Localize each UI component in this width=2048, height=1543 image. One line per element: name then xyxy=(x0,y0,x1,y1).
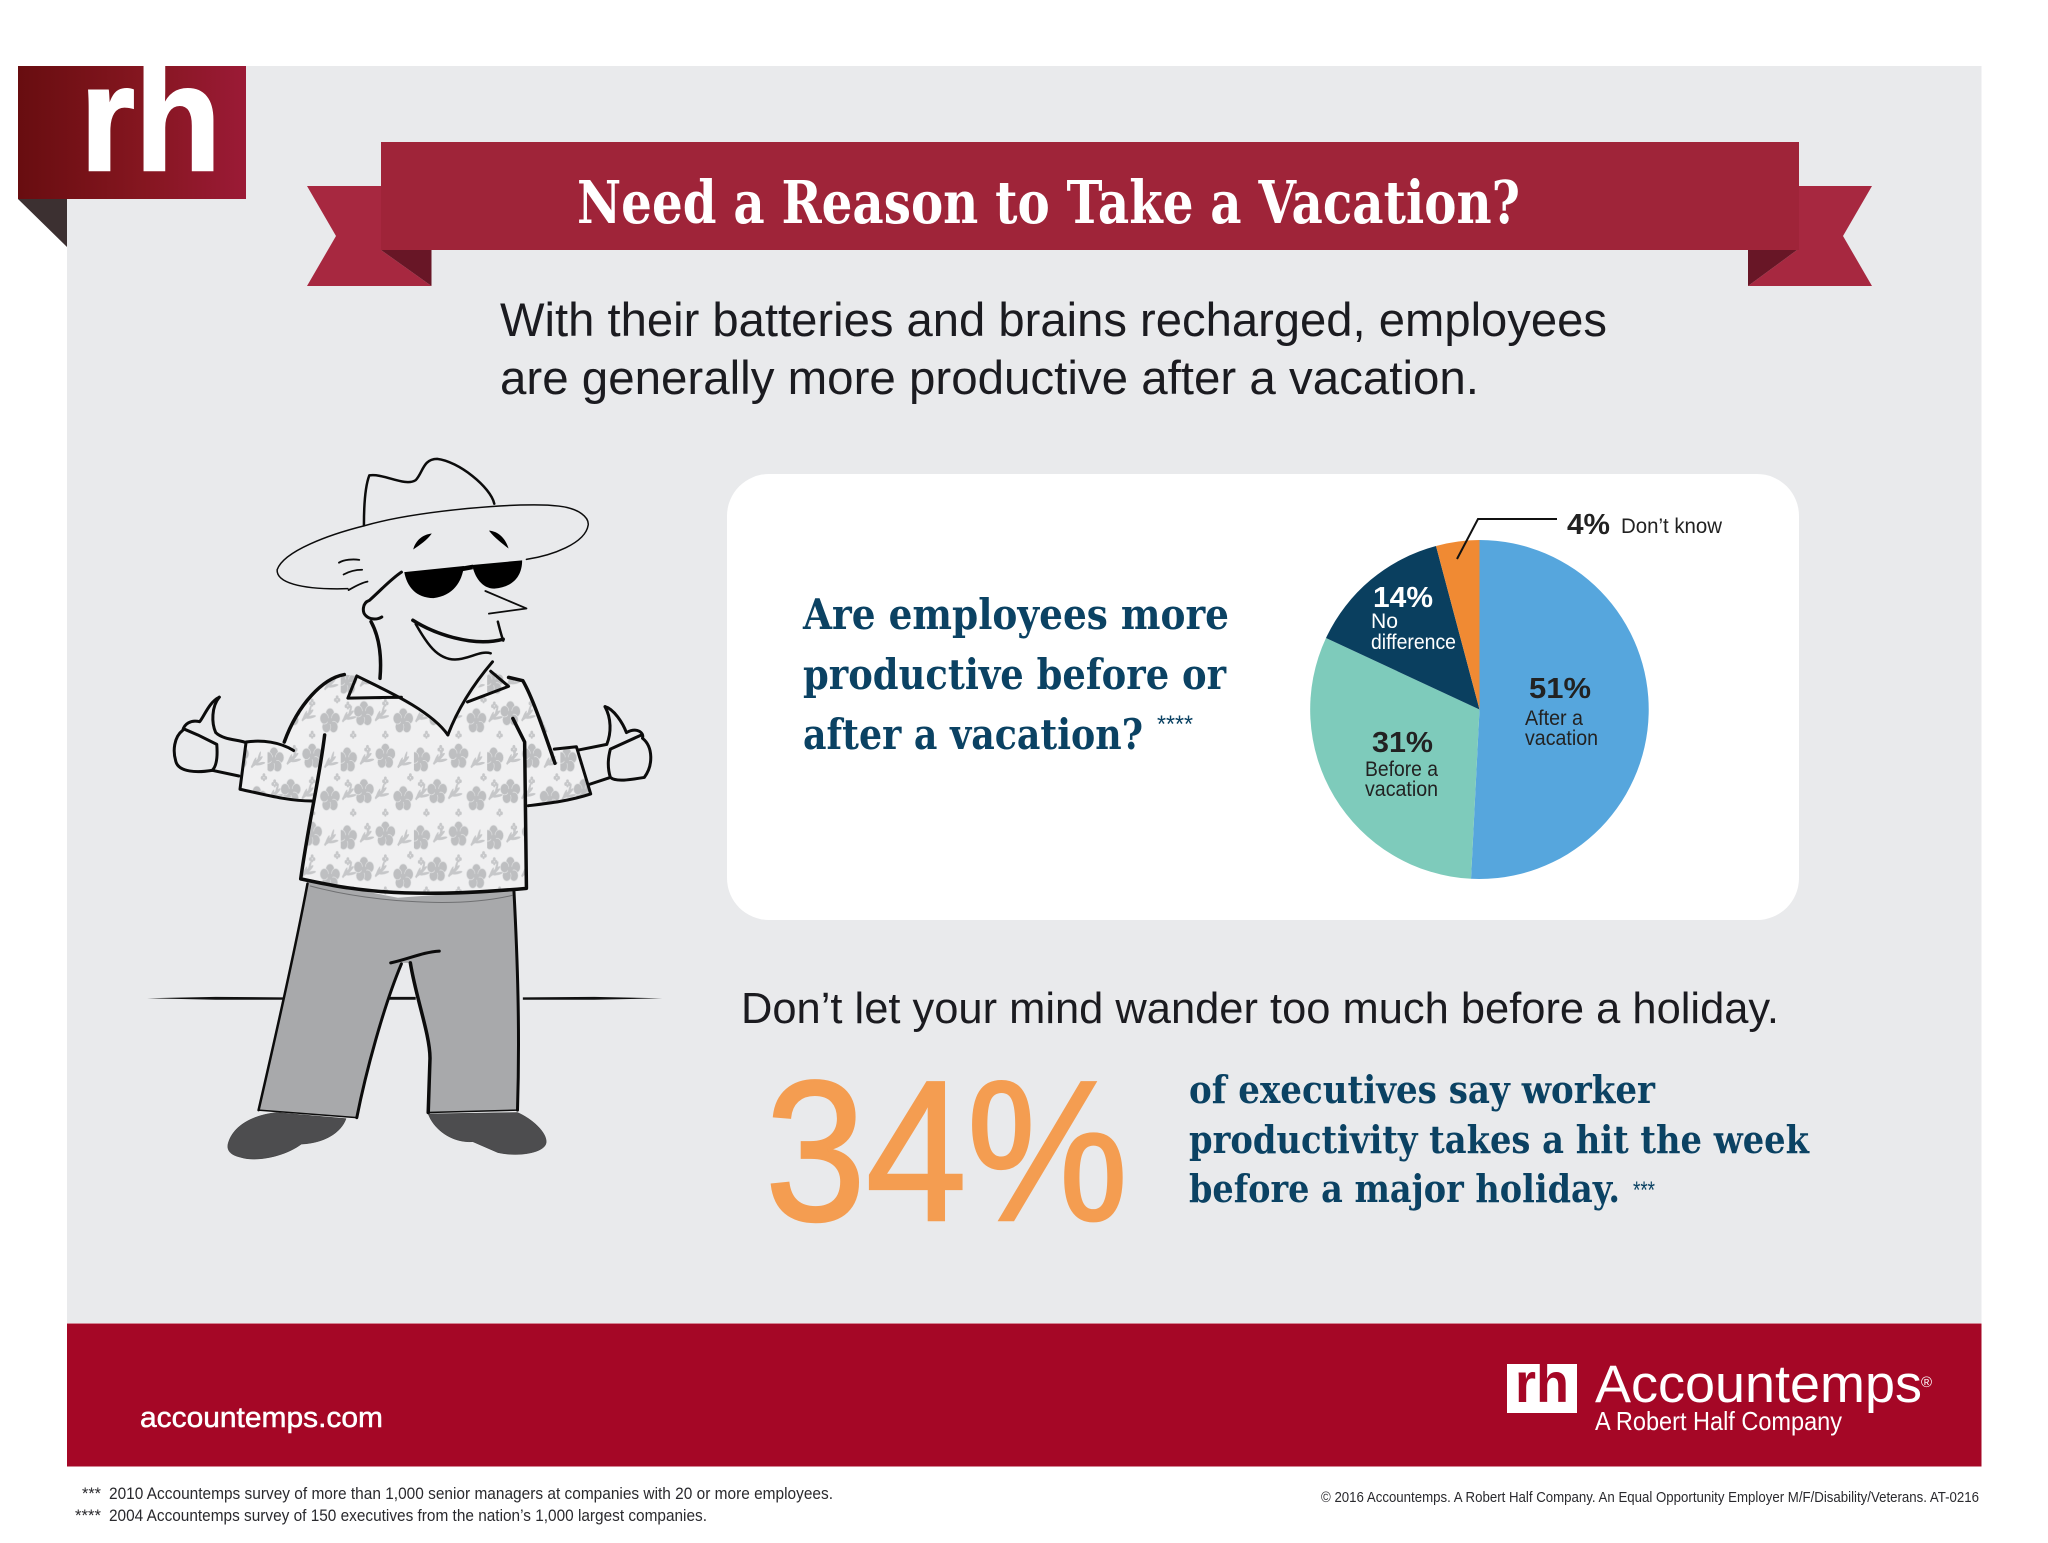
footnotes: 2010 Accountemps survey of more than 1,000 senior managers at companies with 20 or more employees. xyxy=(109,1485,833,1503)
label: 31% before a vacation: 31% xyxy=(1372,727,1433,759)
footnotes: **** xyxy=(75,1507,102,1525)
question heading: productive before or xyxy=(803,650,1227,699)
label: 14% no difference: No xyxy=(1371,610,1398,633)
footnotes xyxy=(75,1485,833,1525)
callout line xyxy=(1457,519,1557,559)
label: 4% don't know xyxy=(1567,509,1723,541)
question heading: Are employees more xyxy=(802,590,1229,639)
website: accountemps.com xyxy=(140,1402,383,1434)
statistic description: *** xyxy=(1633,1177,1655,1204)
label: 4% don't know: 4% xyxy=(1567,509,1610,541)
label: 14% no difference: difference xyxy=(1371,631,1456,654)
intro text: With their batteries and brains recharged, employees xyxy=(500,293,1607,346)
label: 51% after a vacation: After a xyxy=(1525,707,1583,730)
statistic description: of executives say worker xyxy=(1189,1067,1656,1112)
corporate logo tab xyxy=(18,66,246,247)
panel: survey question and pie chart xyxy=(727,474,1799,920)
question heading: after a vacation? xyxy=(803,710,1143,759)
footnotes: *** xyxy=(82,1485,102,1503)
statistic description: before a major holiday. xyxy=(1189,1166,1620,1211)
label: 31% before a vacation xyxy=(1365,727,1438,801)
pie chart xyxy=(1310,509,1723,879)
Accountemps logo: ® xyxy=(1921,1374,1932,1391)
trousers xyxy=(259,881,519,1118)
shoes xyxy=(228,1112,546,1159)
illustration: man in hat and floral shirt xyxy=(147,459,662,1159)
title ribbon: Need a Reason to Take a Vacation? xyxy=(577,168,1520,237)
footnotes: 2004 Accountemps survey of 150 executives from the nation’s 1,000 largest companies. xyxy=(109,1507,707,1525)
label: 51% after a vacation xyxy=(1525,673,1598,750)
copyright: © 2016 Accountemps. A Robert Half Company. An Equal Opportunity Employer M/F/Disability/Veterans. AT-0216 xyxy=(1321,1490,1979,1506)
footer band xyxy=(67,1324,1982,1466)
title ribbon xyxy=(307,142,1872,286)
floral shirt xyxy=(240,662,591,898)
ground line xyxy=(147,997,662,1000)
question heading: **** xyxy=(1157,711,1193,738)
intro text: are generally more productive after a vacation. xyxy=(500,351,1479,404)
label: 31% before a vacation: Before a xyxy=(1365,758,1438,781)
label: 4% don't know: Don’t know xyxy=(1621,515,1723,538)
question heading xyxy=(802,590,1229,759)
Accountemps logo xyxy=(1507,1364,1932,1436)
label: 14% no difference xyxy=(1371,582,1456,654)
intro text xyxy=(500,293,1607,404)
label: 51% after a vacation: vacation xyxy=(1525,727,1598,750)
hands with thumbs up xyxy=(174,697,651,785)
corporate logo tab: rh xyxy=(80,34,221,202)
statistic description: productivity takes a hit the week xyxy=(1189,1117,1810,1162)
holiday subheading: Don’t let your mind wander too much before a holiday. xyxy=(741,984,1779,1033)
Accountemps logo: A Robert Half Company xyxy=(1595,1406,1842,1436)
head, hat and sunglasses xyxy=(277,459,588,678)
label: 31% before a vacation: vacation xyxy=(1365,778,1438,801)
Accountemps logo: rh xyxy=(1515,1351,1569,1414)
Accountemps logo: Accountemps xyxy=(1595,1355,1922,1414)
big statistic: 34%: 34% xyxy=(765,1040,1128,1263)
background panel xyxy=(67,66,1982,1323)
label: 51% after a vacation: 51% xyxy=(1529,673,1591,705)
statistic description xyxy=(1189,1067,1810,1211)
label: 14% no difference: 14% xyxy=(1373,582,1433,614)
